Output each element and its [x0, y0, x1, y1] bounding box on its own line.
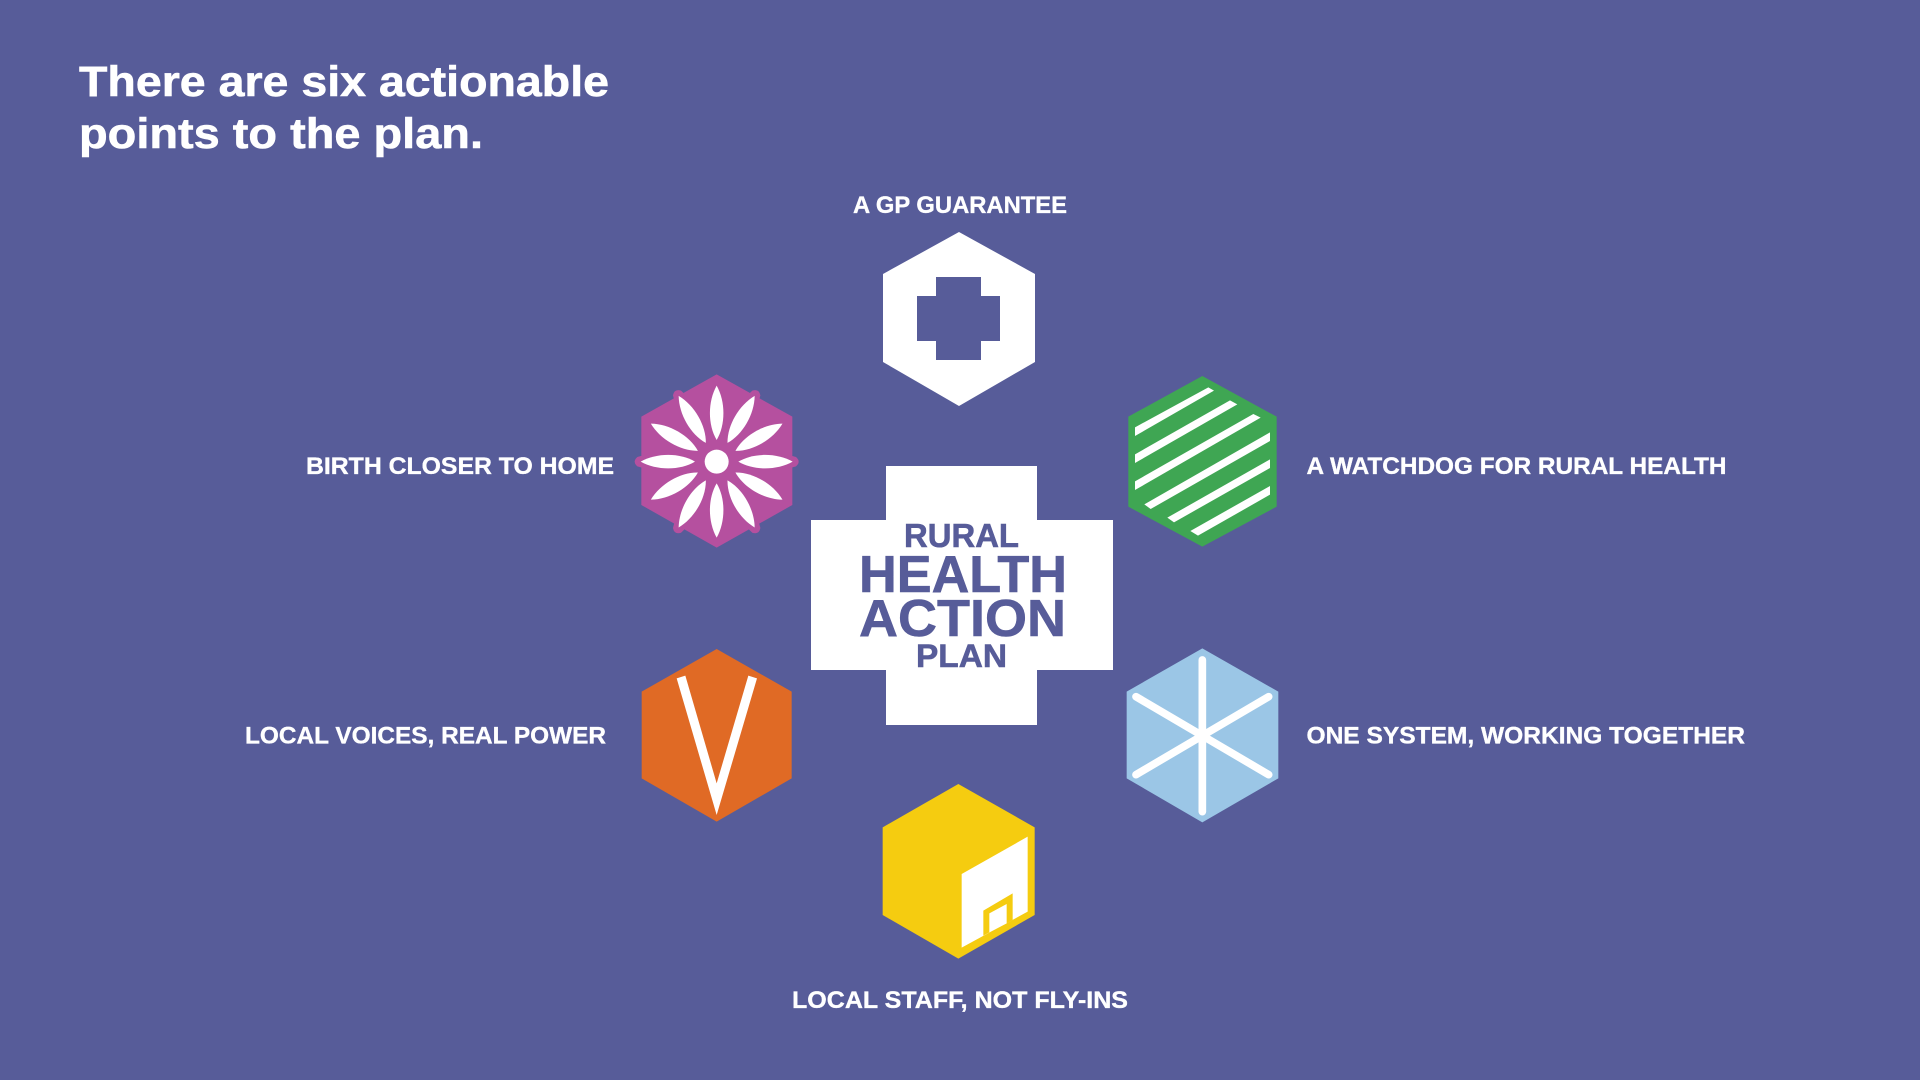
center cross with plan name: RURAL	[904, 517, 1019, 554]
icon: white hexagon with cross	[883, 232, 1035, 406]
center cross with plan name: PLAN	[916, 638, 1007, 674]
title: There are six actionable	[79, 58, 609, 106]
center cross with plan name: ACTION	[859, 590, 1066, 648]
icon: green hexagon with diagonal stripes	[1128, 376, 1277, 547]
title: points to the plan.	[79, 110, 483, 158]
icon: orange hexagon with V	[642, 649, 792, 822]
label: Birth closer to home: BIRTH CLOSER TO HOME	[306, 453, 614, 480]
label: Local voices, real power: LOCAL VOICES, REAL POWER	[245, 722, 606, 750]
icon: light blue hexagon with asterisk	[1127, 648, 1278, 822]
title	[79, 58, 609, 158]
label: A GP Guarantee: A GP GUARANTEE	[853, 192, 1067, 219]
label: One system, working together: ONE SYSTEM, WORKING TOGETHER	[1306, 722, 1745, 750]
label: Local staff, not fly-ins: LOCAL STAFF, NOT FLY-INS	[792, 987, 1128, 1014]
icon: yellow hexagon with house	[883, 784, 1035, 959]
center cross with plan name	[811, 466, 1113, 725]
center cross with plan name: HEALTH	[859, 546, 1067, 604]
label: A watchdog for rural health: A WATCHDOG FOR RURAL HEALTH	[1306, 453, 1726, 480]
icon: magenta hexagon with flower	[635, 374, 799, 548]
